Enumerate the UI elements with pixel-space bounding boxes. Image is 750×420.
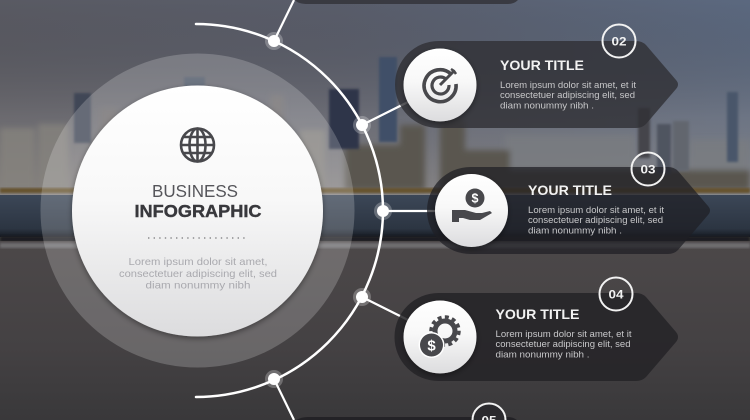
panel: item 01 partial: [295, 0, 518, 4]
title: YOUR TITLE: [528, 182, 612, 198]
text block: [496, 329, 632, 360]
number badge: [600, 278, 632, 310]
text block: central description: [119, 256, 277, 292]
heading: BUSINESS: [152, 181, 238, 201]
icon: hand with coin: $: [472, 192, 479, 206]
text block: Lorem ipsum dolor sit amet, et it: [496, 329, 632, 339]
text block: diam nonummy nibh .: [528, 226, 622, 236]
panel: item 02: [395, 24, 678, 128]
text block: [500, 80, 636, 110]
horizon and water: [0, 188, 750, 193]
number badge: 02: [612, 36, 626, 48]
number badge: [632, 152, 664, 186]
number badge: 03: [640, 164, 656, 176]
text block: central description: consectetuer adipiscing elit, sed: [119, 268, 277, 280]
skyline buildings: [0, 95, 750, 190]
text block: Lorem ipsum dolor sit amet, et it: [500, 80, 636, 90]
number badge: [602, 24, 636, 58]
panel: item 03: [427, 152, 710, 254]
panel: item 05 partial: [295, 404, 518, 420]
text block: central description: Lorem ipsum dolor sit amet,: [128, 256, 268, 268]
title: YOUR TITLE: [496, 306, 580, 322]
text block: central description: diam nonummy nibh: [146, 280, 251, 292]
panel: central translucent ring: [40, 54, 354, 368]
panel: item 04: [394, 278, 678, 381]
text block: consectetuer adipiscing elit, sed: [528, 215, 663, 225]
text block: consectetuer adipiscing elit, sed: [500, 90, 635, 100]
text block: [528, 205, 664, 236]
connector arc with nodes: [196, 0, 440, 420]
text block: diam nonummy nibh .: [500, 100, 594, 110]
icon: gear and dollar coin: $: [427, 338, 436, 354]
text block: consectetuer adipiscing elit, sed: [496, 339, 630, 349]
number badge: 04: [608, 290, 624, 302]
icon: globe: [181, 128, 214, 162]
text block: Lorem ipsum dolor sit amet, et it: [528, 205, 664, 215]
panel: central white circle: [72, 86, 323, 336]
panel: central white circle: INFOGRAPHIC: [134, 201, 262, 221]
text block: diam nonummy nibh .: [496, 350, 590, 360]
icon: target: [404, 48, 476, 122]
icon: gear and dollar coin: [404, 300, 476, 374]
icon: hand with coin: [435, 174, 508, 247]
title: YOUR TITLE: [500, 57, 584, 73]
number badge: [472, 404, 506, 420]
